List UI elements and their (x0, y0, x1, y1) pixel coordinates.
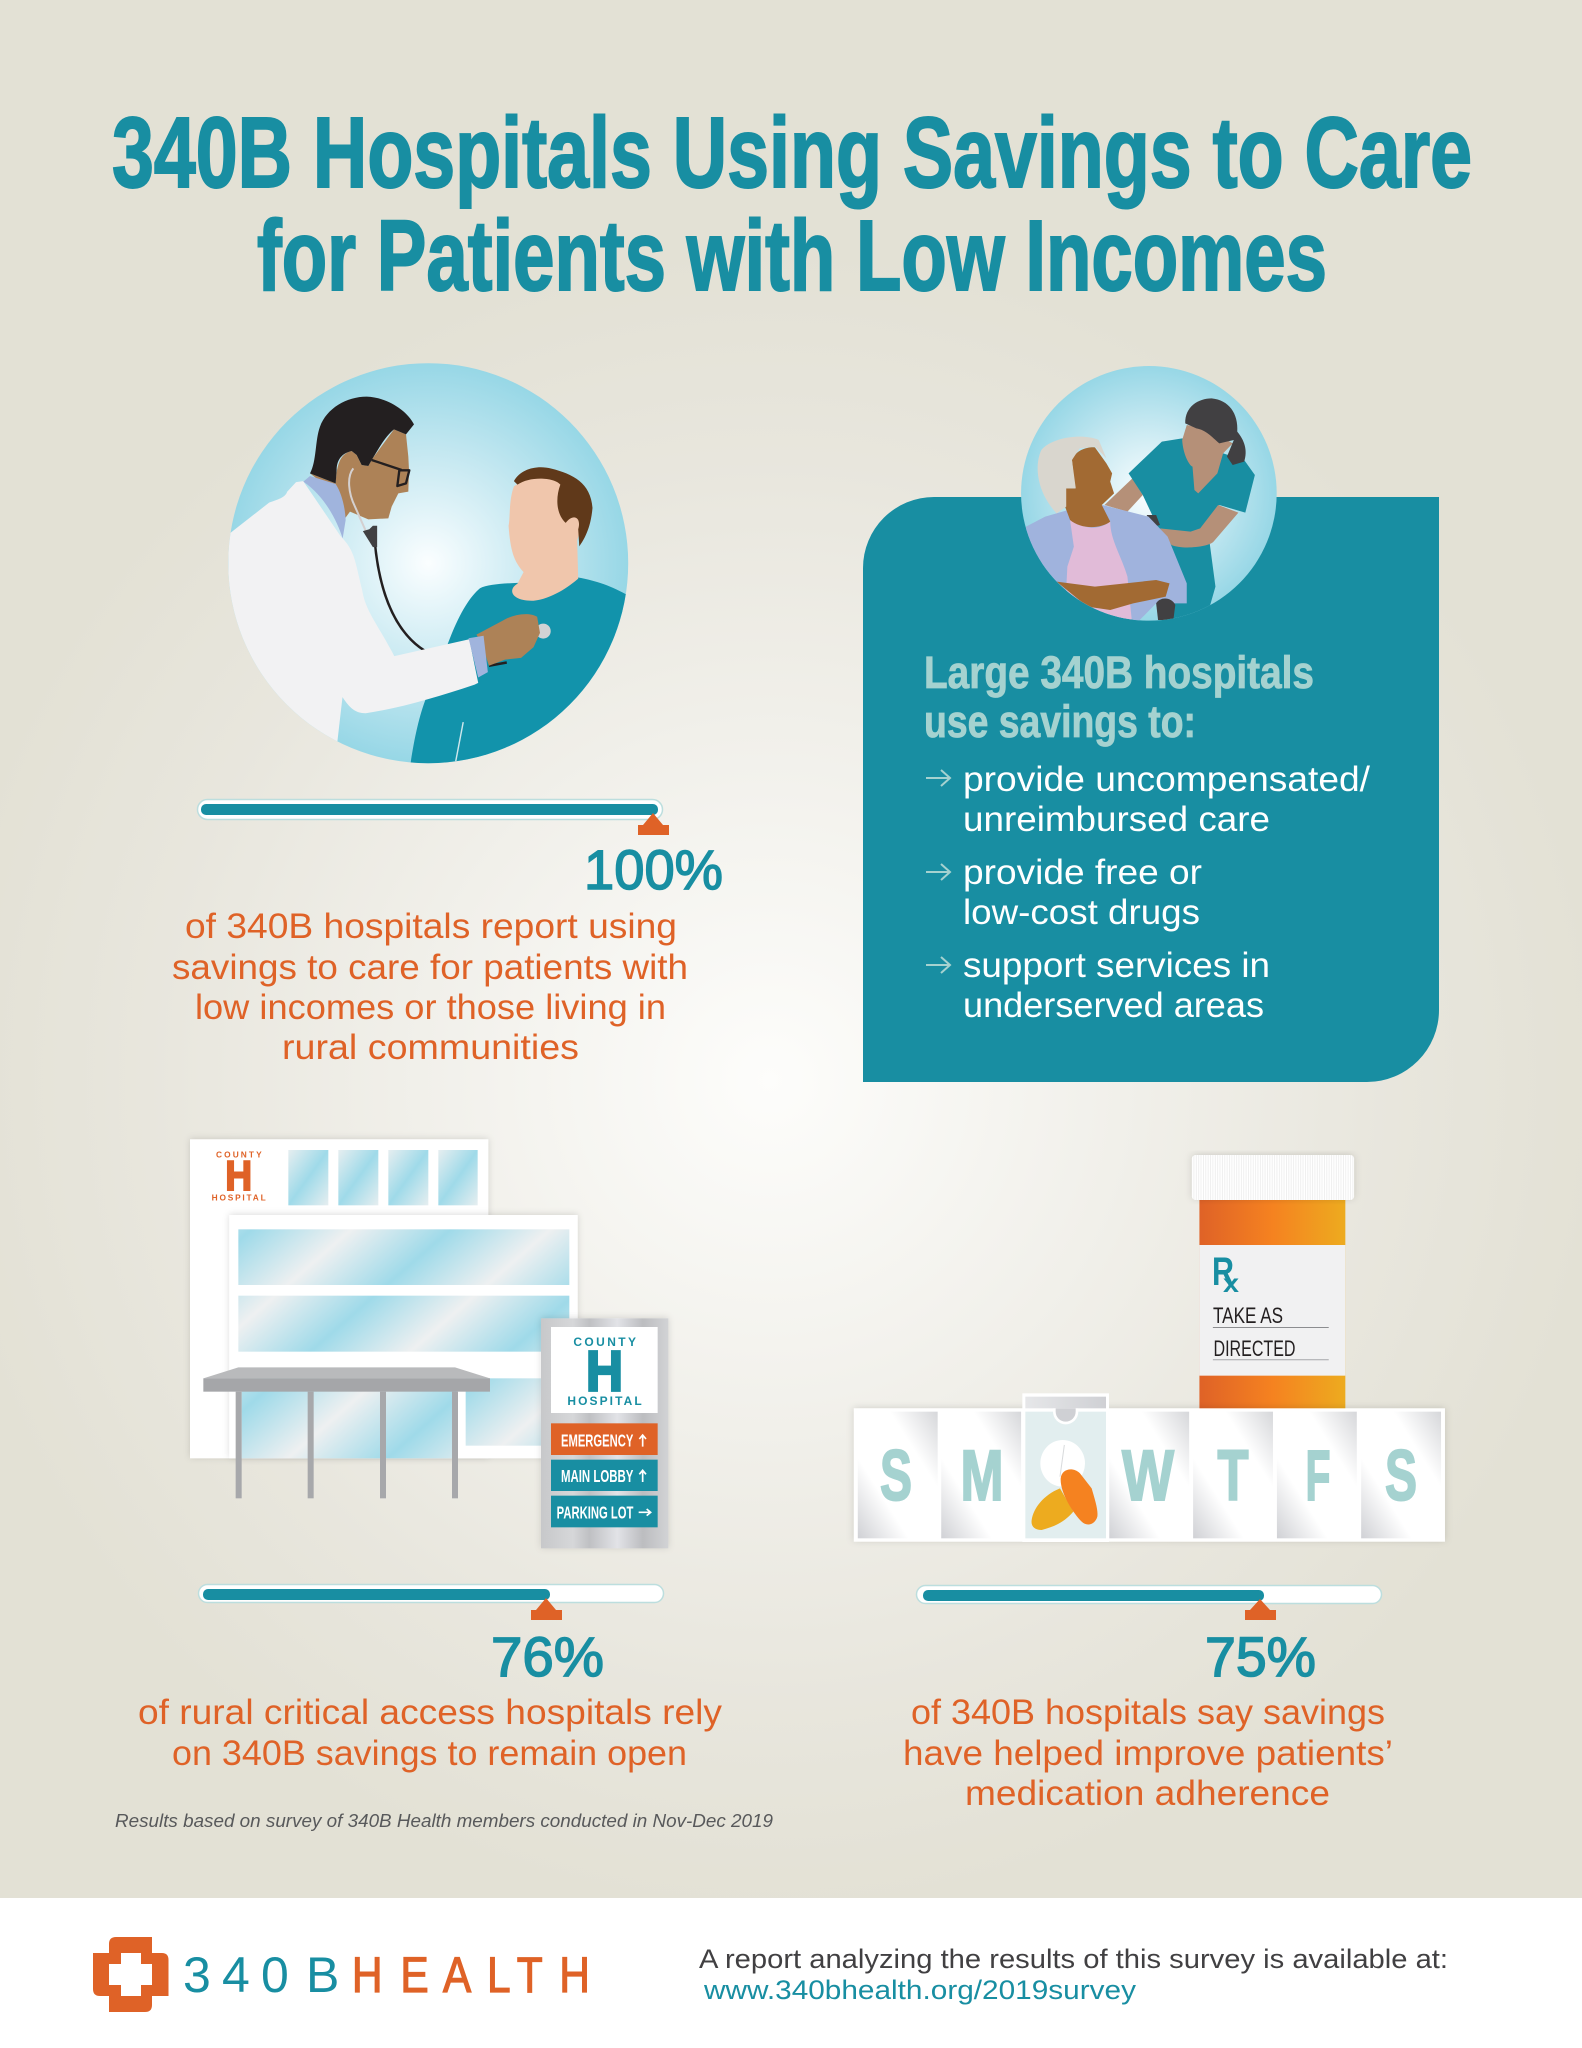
wayfinding sign: PARKING LOT (557, 1503, 633, 1523)
wheelchair handle (1147, 515, 1160, 527)
back building (190, 1139, 488, 1458)
arrow (926, 957, 950, 973)
doctor coat (228, 481, 478, 744)
list item 2 (963, 853, 1202, 932)
text: 100% description: of 340B hospitals report using (185, 907, 677, 946)
bottle body (1199, 1200, 1345, 1410)
patient blouse (1064, 520, 1132, 627)
text: 75% description: of 340B hospitals say savings (911, 1693, 1385, 1732)
text: 100% description: rural communities (282, 1028, 579, 1067)
stethoscope yoke (363, 526, 377, 547)
logo cross icon (93, 1937, 168, 2012)
title (112, 97, 1472, 312)
list item 3 (963, 946, 1270, 1025)
doctor head (303, 397, 414, 538)
list item 2: low-cost drugs (963, 893, 1200, 932)
list item 1 (963, 760, 1370, 839)
illustration: pill bottle: R (1212, 1250, 1234, 1294)
open compartment (1022, 1393, 1109, 1542)
illustration: weekly pill box: S (880, 1437, 912, 1516)
nurse hair (1185, 398, 1246, 465)
wayfinding sign: EMERGENCY (561, 1430, 633, 1450)
illustration: doctor examining patient (228, 363, 630, 765)
text: 100% description: low incomes or those living in (195, 988, 666, 1027)
doctor face (310, 429, 409, 519)
progress bar: 75% (916, 1586, 1382, 1620)
yellow pill (1032, 1488, 1073, 1530)
patient shirt seam (456, 722, 463, 761)
patient hair (1038, 437, 1106, 513)
armrest (1156, 599, 1175, 620)
footnote: Results based on survey of 340B Health members conducted in Nov-Dec 2019 (115, 1811, 773, 1831)
text: 75% description: have helped improve patients’ (903, 1734, 1393, 1773)
panel heading: Large 340B hospitals (924, 647, 1314, 698)
illustration: weekly pill box: M (960, 1437, 1004, 1516)
canopy (203, 1367, 490, 1498)
earpiece (348, 468, 366, 530)
logo: 340B Health: HEALTH (352, 1947, 590, 2003)
report link: www.340bhealth.org/2019survey (703, 1975, 1137, 2005)
wayfinding sign: H (586, 1341, 623, 1404)
patient hair (514, 467, 592, 546)
stethoscope tube (375, 540, 425, 651)
list item 1: unreimbursed care (963, 800, 1270, 839)
panel heading (924, 647, 1314, 747)
building logo (212, 1150, 266, 1202)
wayfinding sign (541, 1318, 668, 1548)
nurse uniform (1129, 438, 1255, 627)
illustration: pill bottle: x (1223, 1270, 1239, 1298)
text: 76% description: of rural critical access hospitals rely (138, 1693, 723, 1732)
doctor hair (310, 397, 414, 483)
stat: 100%: 100% (584, 838, 723, 901)
patient shirt (410, 577, 630, 765)
illustration: weekly pill box: S (1385, 1437, 1417, 1516)
list item 1: provide uncompensated/ (963, 760, 1370, 799)
footer (0, 1898, 1582, 2048)
illustration: pill bottle (1192, 1155, 1354, 1410)
text: 100% description: savings to care for patients with (172, 948, 688, 987)
text: 76% description (138, 1693, 723, 1773)
text: 76% description: on 340B savings to remain open (172, 1734, 687, 1773)
cap (1192, 1155, 1354, 1200)
arrow (926, 770, 950, 786)
wayfinding sign: HOSPITAL (567, 1394, 642, 1408)
cuff (469, 636, 488, 677)
logo: 340B Health: 340B (183, 1947, 339, 2003)
progress bar: 76% (198, 1584, 664, 1620)
illustration: weekly pill box (854, 1393, 1445, 1542)
label (1199, 1245, 1345, 1376)
panel heading: use savings to: (924, 696, 1196, 747)
patient jacket (1022, 505, 1187, 627)
building logo: H (225, 1153, 252, 1199)
wayfinding sign: COUNTY (573, 1335, 636, 1349)
illustration: weekly pill box: F (1306, 1437, 1330, 1516)
arrow (926, 864, 950, 880)
stat: 75%: 75% (1205, 1625, 1316, 1688)
panel: large 340B hospitals (863, 497, 1439, 1082)
progress bar: 100% (198, 800, 669, 835)
nurse face (1182, 425, 1233, 493)
text: 100% description (172, 907, 688, 1067)
text: 75% description: medication adherence (965, 1774, 1330, 1813)
illustration: pill bottle: TAKE AS (1213, 1303, 1283, 1328)
illustration: weekly pill box: W (1122, 1437, 1174, 1516)
panel list (926, 760, 1370, 1025)
doctor hand (476, 614, 540, 666)
front building (229, 1215, 578, 1458)
building logo: COUNTY (216, 1150, 262, 1160)
chest piece (538, 624, 551, 639)
illustration: nurse and patient (1021, 366, 1277, 627)
text: 75% description (903, 1693, 1393, 1813)
orange pill (1061, 1469, 1098, 1524)
list item 3: underserved areas (963, 986, 1264, 1025)
collar (303, 476, 346, 538)
wayfinding sign: MAIN LOBBY (561, 1466, 633, 1486)
patient skin (1065, 447, 1114, 527)
list item 2: provide free or (963, 853, 1202, 892)
glasses (372, 460, 402, 470)
report note: A report analyzing the results of this survey is available at: (699, 1944, 1448, 1974)
building logo: HOSPITAL (212, 1192, 266, 1202)
nurse arms (1104, 478, 1143, 512)
patient arm (1057, 580, 1170, 610)
illustration: hospital building (190, 1139, 668, 1548)
illustration: pill bottle: DIRECTED (1214, 1336, 1296, 1361)
patient head and neck (508, 478, 579, 601)
list item 3: support services in (963, 946, 1270, 985)
illustration: weekly pill box: T (1218, 1437, 1248, 1516)
logo: 340B Health (93, 1937, 590, 2012)
stat: 76%: 76% (491, 1625, 604, 1688)
white pill (1040, 1440, 1085, 1487)
